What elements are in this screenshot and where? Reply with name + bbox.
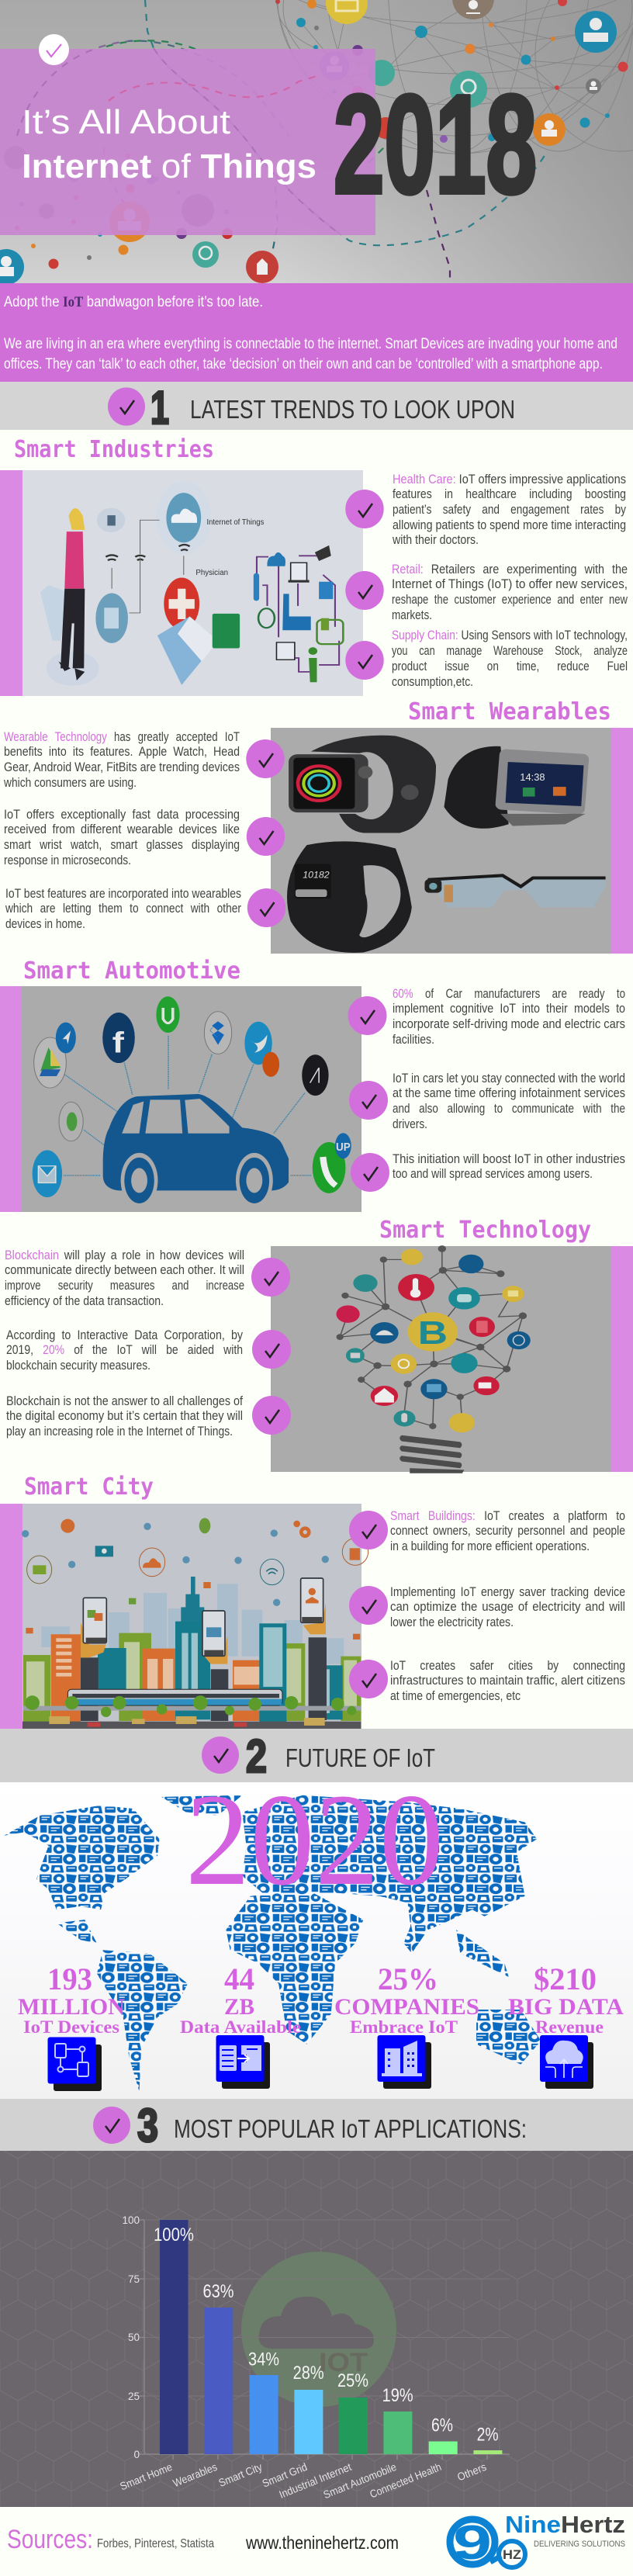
heading: Smart Automotive: Smart Automotive	[23, 957, 240, 985]
section 2 band: FUTURE OF IoT	[285, 1743, 435, 1772]
heading: Smart Wearables: Smart Wearables	[408, 698, 611, 725]
y axis labels: 0	[133, 2449, 140, 2460]
watermark cloud badge	[241, 2252, 396, 2407]
panel: automotive image: UP	[336, 1141, 351, 1153]
panel: automotive image	[0, 986, 361, 1212]
section 3 band: 3	[137, 2100, 158, 2152]
footer website: www.theninehertz.com	[245, 2533, 399, 2553]
stat: 25% companies: 25%	[378, 1961, 438, 1996]
category labels: Industrial Internet	[277, 2460, 353, 2501]
text: best features: IoT best features are incorporated into wearables	[5, 886, 241, 901]
big year 2020: 2020	[185, 1767, 444, 1913]
intro band	[0, 283, 633, 382]
y axis labels: 75	[128, 2273, 140, 2285]
section 3 band	[0, 2099, 633, 2152]
footer sources: Forbes, Pinterest, Statista	[97, 2537, 214, 2550]
y axis labels: 50	[128, 2332, 140, 2343]
hero title	[22, 103, 316, 185]
footer sources: Sources:	[7, 2525, 93, 2554]
stat: 25% companies	[334, 1961, 479, 2089]
bar value labels: 100%	[154, 2225, 194, 2245]
section 1 band: 1	[150, 382, 169, 434]
stat: 25% companies: COMPANIES	[334, 1994, 479, 2020]
category labels: Smart Grid	[261, 2460, 309, 2490]
icon: check	[251, 1258, 290, 1297]
dashed connection arcs	[17, 0, 547, 283]
text: challenges: Blockchain is not the answer to all challenges of	[6, 1394, 243, 1408]
icon: check	[348, 996, 386, 1035]
bar value labels: 25%	[337, 2370, 368, 2391]
text: initiation	[393, 1151, 625, 1181]
y axis labels: 25	[128, 2391, 140, 2402]
text: challenges: the digital economy but it’s certain that they will	[6, 1408, 243, 1423]
panel: wearables image: 14:38	[520, 772, 545, 783]
panel: automotive image: f	[112, 1026, 125, 1059]
text: data processing: smart wrist watch, smart glasses displaying	[4, 837, 240, 852]
hero banner	[0, 0, 633, 285]
bar value labels	[154, 2225, 499, 2446]
section 1 band	[0, 382, 633, 434]
text: wearable technology: Wearable Technology has greatly accepted IoT	[4, 729, 240, 744]
panel: technology image: B	[418, 1314, 448, 1351]
hero title: Internet of Things	[22, 147, 316, 185]
text: data processing: IoT offers exceptionally fast data processing	[4, 807, 240, 822]
globe network	[275, 0, 633, 154]
text: safer cities	[390, 1658, 625, 1703]
text: energy saver: lower the electricity rates.	[390, 1615, 514, 1629]
icon: check	[345, 571, 384, 610]
text: challenges: play an increasing role in the Internet of Things.	[6, 1424, 233, 1439]
wearables bullets	[246, 739, 285, 927]
text: smart buildings: in a building for more efficient operations.	[390, 1539, 590, 1553]
bar value labels: 19%	[382, 2385, 413, 2406]
pink translucent title panel	[0, 49, 375, 235]
category labels: Smart City	[216, 2460, 264, 2489]
text: interactive data corporation: blockchain security measures.	[6, 1358, 150, 1373]
smart watch	[444, 746, 509, 829]
panel: wearables image	[271, 728, 633, 954]
panel: city image	[0, 1504, 368, 1729]
text: best features: which are letting them to connect with other	[5, 901, 241, 916]
text: blockchain: Blockchain will play a role in how devices will	[5, 1248, 244, 1262]
text: energy saver	[390, 1584, 625, 1629]
heading: Smart Industries: Smart Industries	[14, 436, 214, 463]
text: retail: markets.	[392, 608, 432, 622]
icon: check	[349, 1511, 388, 1549]
icon: check	[252, 1330, 291, 1369]
intro paragraph	[4, 336, 617, 372]
automotive bullets	[348, 996, 389, 1192]
stat: 193 million	[18, 1961, 125, 2091]
text: wearable technology: benefits into its features. Apple Watch, Head	[4, 744, 240, 759]
icon: check	[246, 739, 285, 778]
bar value labels: 28%	[293, 2363, 324, 2384]
text: wearable technology: which consumers are using.	[3, 775, 137, 790]
stat: $210 big data: BIG DATA	[508, 1994, 624, 2020]
bars	[160, 2220, 502, 2454]
intro headline: Adopt the IoT bandwagon before it’s too late.	[4, 294, 263, 310]
text: car manufacturers: facilities.	[393, 1032, 434, 1047]
bar value labels: 63%	[203, 2281, 234, 2302]
icon: check	[247, 817, 285, 856]
icon: check	[247, 888, 285, 927]
icon: white check circle	[39, 34, 69, 65]
footer sources	[7, 2525, 214, 2554]
text: car manufacturers	[393, 986, 625, 1047]
text: data processing	[4, 807, 240, 867]
text: blockchain: improve security measures and increase	[5, 1278, 244, 1293]
panel: technology image	[271, 1245, 633, 1473]
network nodes	[0, 0, 628, 285]
smart glasses	[438, 874, 606, 907]
text: challenges	[6, 1394, 243, 1439]
section 2 band	[0, 1729, 633, 1782]
stat: 44 zb: 44	[224, 1961, 254, 1996]
category labels: Smart Automobile	[321, 2460, 398, 2501]
text: data processing: response in microseconds.	[4, 853, 131, 867]
icon: check	[351, 1153, 389, 1192]
stat: $210 big data: Revenue	[535, 2017, 604, 2037]
panel: wearables image: 10182	[303, 870, 330, 880]
logo: NineHertz: 9	[453, 2516, 492, 2570]
section 3 band: MOST POPULAR IoT APPLICATIONS:	[174, 2114, 527, 2143]
text: health care	[392, 472, 626, 547]
text: supply chain	[392, 628, 628, 689]
panel: smart industries image: Internet of Things	[206, 518, 264, 527]
category labels: Others	[455, 2460, 488, 2483]
text: connected cars	[393, 1071, 625, 1131]
stat: $210 big data	[508, 1961, 624, 2089]
logo: NineHertz: HZ	[503, 2547, 521, 2562]
icon: check	[345, 641, 384, 680]
category labels	[118, 2460, 488, 2501]
watermark cloud badge: IOT	[319, 2348, 368, 2377]
logo: NineHertz	[450, 2511, 625, 2570]
industries bullets	[345, 490, 384, 680]
icon: cloud upload	[540, 2035, 593, 2089]
text: wearable technology: Gear, Android Wear, FitBits are trending devices	[4, 760, 240, 774]
section 1 band: LATEST TRENDS TO LOOK UPON	[190, 395, 515, 424]
bar chart panel	[0, 2151, 633, 2507]
logo: NineHertz: NineHertz	[505, 2511, 625, 2538]
text: blockchain: communicate directly between each other. It will	[5, 1262, 244, 1277]
category labels: Wearables	[171, 2460, 219, 2489]
text: smart buildings	[390, 1508, 625, 1553]
text: health care: with their doctors.	[392, 532, 479, 547]
stat: 193 million: 193	[47, 1961, 92, 1996]
stat: 25% companies: Embrace IoT	[350, 2017, 458, 2037]
text: best features	[5, 886, 241, 931]
bar value labels: 6%	[431, 2415, 453, 2436]
apple watch	[311, 736, 436, 833]
text: blockchain: efficiency of the data transaction.	[5, 1293, 164, 1308]
text: data processing: received from different wearable devices like	[4, 822, 240, 836]
text: initiation: too and will spread services among users.	[393, 1166, 593, 1181]
text: supply chain: consumption,etc.	[392, 674, 473, 689]
stat: 193 million: IoT Devices	[23, 2017, 119, 2037]
text: connected cars: drivers.	[393, 1117, 427, 1131]
text: interactive data corporation	[6, 1328, 243, 1373]
city bullets	[349, 1511, 388, 1698]
icon: check	[349, 1586, 388, 1625]
icon: data transfer	[216, 2035, 270, 2089]
icon: check	[252, 1396, 291, 1435]
hero title: It’s All About	[22, 103, 230, 141]
icon: check	[349, 1081, 388, 1120]
text: blockchain	[5, 1248, 244, 1308]
text: interactive data corporation: According to Interactive Data Corporation, by	[6, 1328, 243, 1342]
fitness band	[287, 841, 412, 953]
heading: Smart Technology: Smart Technology	[379, 1217, 591, 1244]
technology bullets	[251, 1258, 291, 1435]
icon: check	[349, 1660, 388, 1698]
world map of icons	[0, 1767, 633, 2099]
text: wearable technology	[3, 729, 240, 790]
category labels: Connected Health	[368, 2460, 443, 2500]
text: best features: devices in home.	[5, 916, 85, 931]
bar value labels: 34%	[248, 2349, 279, 2370]
stat: 44 zb	[180, 1961, 301, 2089]
panel: smart industries image	[0, 470, 363, 696]
category labels: Smart Home	[118, 2460, 174, 2492]
y axis labels	[122, 2214, 140, 2460]
stat: 44 zb: ZB	[224, 1994, 254, 2020]
section 2 band: 2	[246, 1730, 267, 1782]
heading: Smart City: Smart City	[24, 1473, 154, 1501]
grid lines and axes	[144, 2220, 510, 2396]
y axis labels: 100	[122, 2214, 140, 2226]
icon: check	[345, 490, 384, 528]
text: safer cities: at time of emergencies, etc	[390, 1688, 521, 1703]
bar value labels: 2%	[477, 2424, 499, 2446]
text: interactive data corporation: 2019, 20% of the IoT will be aided with	[6, 1342, 243, 1357]
icon: buildings	[377, 2035, 431, 2089]
stat: 44 zb: Data Available	[180, 2017, 301, 2037]
icon: devices	[48, 2038, 102, 2091]
panel: smart industries image: Physician	[195, 569, 228, 577]
stat: $210 big data: $210	[534, 1961, 597, 1996]
dashes through panel	[17, 41, 341, 235]
stat: 193 million: MILLION	[18, 1994, 125, 2020]
text: retail	[392, 562, 628, 622]
